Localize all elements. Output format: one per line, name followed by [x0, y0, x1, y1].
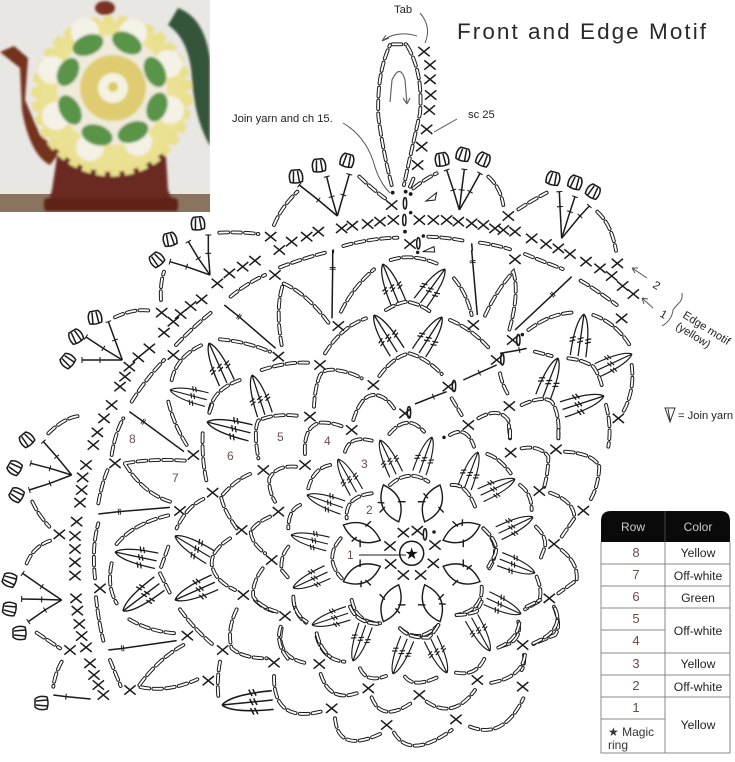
- legend: join yarn: [665, 408, 733, 422]
- colour names: Off-white: [674, 569, 722, 583]
- row numbers: 3: [632, 656, 640, 671]
- table header: Row: [621, 520, 645, 534]
- row numbers on chart: 3: [361, 457, 368, 471]
- photo: teapot with crochet cosy: [0, 0, 210, 212]
- arrows: edge motif rows: 1: [658, 308, 669, 322]
- magic ring and row 1: [384, 526, 441, 580]
- row numbers: 1: [632, 700, 640, 715]
- upper right edge: [515, 192, 639, 447]
- row numbers: ★ Magic: [608, 725, 654, 739]
- colour names: Green: [681, 591, 715, 605]
- title: Front and Edge Motif: [457, 19, 707, 44]
- table: row colours: [601, 511, 730, 753]
- top rows of chart: [269, 250, 527, 454]
- row numbers on chart: 5: [277, 430, 284, 444]
- crochet chart: [1, 44, 639, 746]
- row numbers: [608, 545, 654, 752]
- label: join yarn and chain 15: [232, 113, 390, 193]
- row numbers: 7: [632, 567, 640, 582]
- magic ring and row 1: ★: [405, 544, 419, 563]
- legend: join yarn: = Join yarn: [678, 410, 733, 422]
- colour names: Yellow: [681, 718, 716, 732]
- row numbers: 8: [632, 545, 640, 560]
- colour names: Off-white: [674, 680, 722, 694]
- row numbers: 6: [632, 589, 640, 604]
- row numbers on chart: 2: [366, 503, 373, 517]
- tab and top edge: [274, 44, 521, 255]
- arrows: edge motif rows: 2: [650, 279, 662, 293]
- row numbers: 4: [632, 633, 640, 648]
- row numbers on chart: 8: [129, 432, 136, 446]
- colour names: [674, 546, 722, 732]
- row numbers on chart: 4: [324, 434, 331, 448]
- arrows: edge motif rows: [632, 268, 682, 326]
- far left edge: [22, 400, 220, 700]
- row numbers on chart: 6: [227, 449, 234, 463]
- row numbers on chart: [129, 430, 373, 562]
- bottom rows: [255, 600, 557, 746]
- row numbers: ring: [608, 738, 628, 752]
- label: sc 25: [434, 109, 495, 132]
- table header: Color: [684, 520, 712, 534]
- colour names: Yellow: [681, 657, 716, 671]
- label: sc 25: sc 25: [468, 109, 495, 121]
- label: edge motif yellow: Edge motif: [680, 309, 733, 348]
- row 3 chain arcs: [332, 476, 495, 636]
- row numbers: 2: [632, 678, 640, 693]
- right side rows: [483, 430, 599, 670]
- bobble stitches: [1, 147, 602, 710]
- row numbers on chart: 7: [172, 471, 179, 485]
- row numbers on chart: 1: [347, 548, 354, 562]
- label: edge motif yellow: (yellow): [673, 320, 713, 351]
- upper left edge: [82, 232, 308, 413]
- row 2 petals: [338, 480, 485, 627]
- stitch clusters: [113, 260, 636, 718]
- label: Tab: [382, 4, 428, 104]
- label: Tab: Tab: [394, 4, 412, 16]
- table header: [601, 511, 730, 542]
- row numbers: 5: [632, 611, 640, 626]
- left side rows: [160, 401, 330, 659]
- colour names: Yellow: [681, 546, 716, 560]
- leader to magic ring: [359, 554, 406, 556]
- colour names: Off-white: [674, 624, 722, 638]
- label: join yarn and chain 15: Join yarn and ch 15.: [232, 113, 333, 125]
- table grid: [601, 542, 730, 753]
